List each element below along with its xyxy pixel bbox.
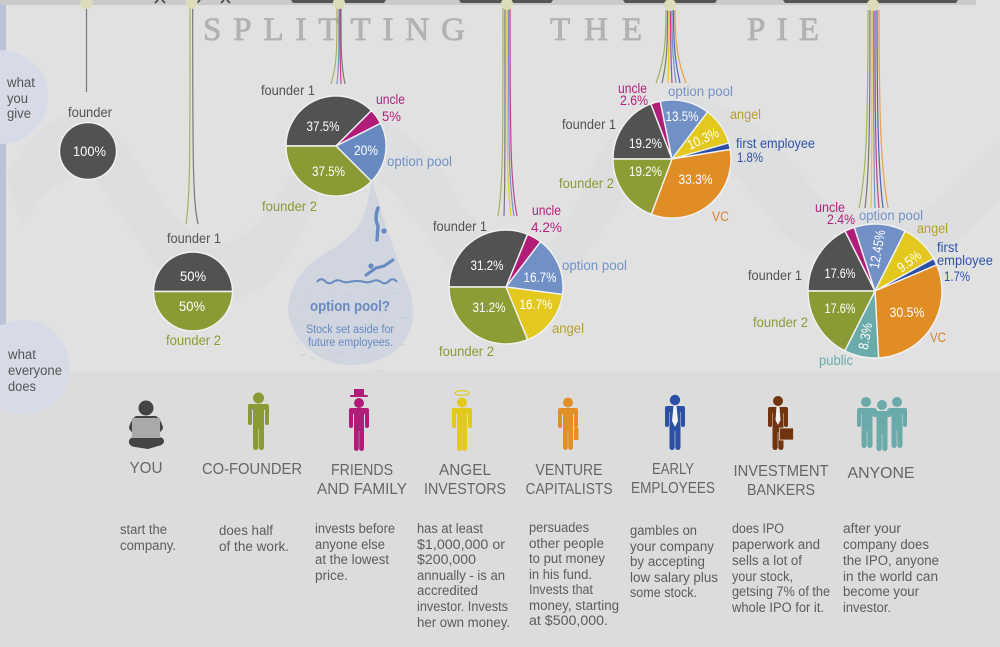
stage 4 pie: angel: 16.7%	[520, 296, 552, 312]
stage 4 pie: angel	[433, 203, 627, 359]
stage 4 pie: angel: angel	[552, 321, 584, 336]
text: investment bankers: does IPO	[732, 521, 784, 536]
heading: venture capitalists	[526, 462, 612, 498]
heading: investment bankers: BANKERS	[747, 482, 815, 499]
text: angel investors: annually - is an	[417, 568, 505, 583]
heading: friends and family: FRIENDS	[331, 462, 393, 479]
text: anyone	[843, 521, 939, 615]
text: venture capitalists: money, starting	[529, 598, 619, 613]
stage 4 pie: angel: 31.2%	[470, 257, 504, 273]
stage 3 pie: friends and family: 37.5%	[306, 118, 340, 134]
icon: venture capitalist	[558, 398, 578, 450]
text: venture capitalists: at $500,000.	[529, 613, 608, 628]
stage 6 pie: public: founder 1	[748, 268, 802, 283]
heading: early employees: EARLY	[652, 461, 694, 478]
water ripples	[295, 293, 409, 371]
heading: angel investors	[424, 462, 506, 498]
icon: friends and family	[349, 389, 369, 451]
callout: option pool drop	[288, 180, 413, 371]
label: what you give: give	[7, 106, 31, 121]
stage 5 pie: venture capital: first employee	[736, 136, 815, 151]
text: early employees: by accepting	[630, 554, 705, 569]
label: what everyone does	[0, 320, 70, 414]
text: early employees	[630, 523, 718, 600]
text: friends and family: price.	[315, 568, 348, 583]
title: THE	[550, 12, 642, 48]
stage 5 pie: venture capital: 2.6%	[620, 93, 648, 108]
text: investment bankers: your stock,	[732, 569, 793, 584]
icon: co-founder	[248, 392, 269, 450]
title	[203, 12, 819, 48]
top bar with hanging knots	[0, 0, 976, 5]
text: venture capitalists: in his fund.	[529, 567, 592, 582]
stage 5 pie: venture capital: 19.2%	[629, 135, 662, 151]
stage 3 pie: friends and family: 37.5%	[312, 163, 345, 179]
callout text: future employees.	[308, 337, 393, 349]
stage 3 pie: friends and family: founder 1	[261, 83, 315, 98]
heading: friends and family: AND FAMILY	[317, 481, 407, 498]
text: anyone: after your	[843, 521, 902, 536]
callout text	[306, 298, 394, 349]
stage 1 pie: founder: founder	[68, 105, 112, 120]
callout text: Stock set aside for	[306, 324, 394, 336]
text: investment bankers: getsing 7% of the	[732, 584, 830, 599]
stage 2 pie: two founders: founder 1	[167, 231, 221, 246]
stage 6 pie: public: 30.5%	[890, 304, 924, 320]
thread knots	[80, 0, 879, 11]
heading: angel investors: INVESTORS	[424, 481, 506, 498]
text: venture capitalists: persuades	[529, 520, 589, 535]
stage 3 pie: friends and family: uncle	[376, 92, 405, 107]
heading: anyone: ANYONE	[848, 465, 914, 482]
stage 4 pie: angel: founder 2	[439, 344, 494, 359]
text: angel investors	[417, 521, 510, 630]
text: anyone: in the world can	[843, 569, 938, 584]
stage 2 pie: two founders: 50%	[180, 268, 206, 284]
label: what everyone does: everyone	[8, 363, 62, 378]
text: early employees: your company	[630, 539, 714, 554]
stage 2 pie: two founders	[154, 231, 232, 348]
stage 5 pie: venture capital: option pool	[668, 84, 733, 99]
text: investment bankers	[731, 521, 830, 615]
stage 3 pie: friends and family	[261, 83, 452, 214]
stage 5 pie: venture capital	[559, 81, 815, 224]
icon: anyone, group of three	[857, 397, 907, 451]
label: what you give	[0, 50, 48, 144]
stage 5 pie: venture capital: founder 1	[562, 117, 616, 132]
text: early employees: some stock.	[630, 585, 697, 600]
stage 4 pie: angel: 4.2%	[531, 220, 562, 235]
stage 6 pie: public: option pool	[859, 208, 923, 223]
heading: venture capitalists: CAPITALISTS	[526, 481, 612, 498]
text: you	[120, 522, 176, 553]
stage 6 pie: public: VC	[930, 330, 946, 345]
stage 3 pie: friends and family: founder 2	[262, 199, 317, 214]
text: early employees: low salary plus	[630, 570, 718, 585]
stage 4 pie: angel: uncle	[532, 203, 561, 218]
text: friends and family	[315, 521, 395, 583]
stage 6 pie: public	[748, 200, 993, 368]
stage 5 pie: venture capital: VC	[712, 209, 729, 224]
icon: swimmer and waves	[317, 260, 397, 283]
text: venture capitalists: Invests that	[529, 582, 593, 597]
stage 6 pie: public: angel	[917, 221, 948, 236]
stage 6 pie: public: public	[819, 353, 853, 368]
text: co-founder: does half	[219, 523, 273, 538]
text: angel investors: investor. Invests	[417, 599, 508, 614]
icon: diver	[376, 208, 387, 240]
heading: co-founder: CO-FOUNDER	[202, 461, 302, 478]
heading: investment bankers	[734, 463, 829, 499]
stage 5 pie: venture capital: 10.3%	[685, 124, 721, 153]
heading: friends and family	[317, 462, 407, 498]
stage 5 pie: venture capital: 19.2%	[629, 163, 662, 179]
text: co-founder	[219, 523, 289, 554]
icon: you with laptop	[129, 400, 164, 449]
heading: venture capitalists: VENTURE	[536, 462, 602, 479]
label: what you give: you	[7, 91, 28, 106]
text: you: company.	[120, 538, 176, 553]
text: you: start the	[120, 522, 167, 537]
heading: you: YOU	[130, 460, 162, 477]
stage 6 pie: public: 9.5%	[894, 247, 924, 275]
stage 5 pie: venture capital: founder 2	[559, 176, 614, 191]
stage 6 pie: public: 17.6%	[824, 265, 856, 281]
heading: early employees	[631, 461, 715, 497]
icon: angel investor	[452, 391, 472, 451]
text: venture capitalists	[529, 520, 619, 628]
stage 4 pie: angel: 16.7%	[524, 269, 556, 285]
text: anyone: the IPO, anyone	[843, 553, 939, 568]
text: investment bankers: paperwork and	[732, 537, 820, 552]
text: friends and family: invests before	[315, 521, 395, 536]
stage 5 pie: venture capital: 33.3%	[678, 171, 712, 187]
stage 4 pie: angel: option pool	[562, 258, 627, 273]
text: angel investors: has at least	[417, 521, 483, 536]
text: anyone: investor.	[843, 600, 891, 615]
title: SPLITTING	[203, 12, 465, 48]
text: anyone: company does	[843, 537, 929, 552]
stage 2 pie: two founders: founder 2	[166, 333, 221, 348]
stage 2 pie: two founders: 50%	[179, 298, 205, 314]
stage 6 pie: public: founder 2	[753, 315, 808, 330]
stage 6 pie: public: 17.6%	[824, 300, 856, 316]
callout text: option pool?	[310, 298, 390, 315]
stage 1 pie: founder	[60, 105, 116, 180]
stage 6 pie: public: 8.3%	[855, 321, 875, 351]
text: venture capitalists: to put money	[529, 551, 605, 566]
stage 6 pie: public: uncle	[815, 200, 845, 215]
heading: early employees: EMPLOYEES	[631, 480, 715, 497]
title: PIE	[747, 12, 819, 48]
stage 6 pie: public: 2.4%	[827, 212, 855, 227]
text: friends and family: at the lowest	[315, 552, 389, 567]
text: early employees: gambles on	[630, 523, 697, 538]
text: venture capitalists: other people	[529, 536, 604, 551]
stage 4 pie: angel: founder 1	[433, 219, 487, 234]
stage 3 pie: friends and family: 5%	[382, 109, 401, 124]
stage 1 pie: founder: 100%	[73, 143, 106, 159]
text: friends and family: anyone else	[315, 537, 385, 552]
stage 6 pie: public: first	[937, 240, 958, 255]
icon: investment banker	[768, 396, 794, 450]
label: what you give: what	[6, 75, 35, 90]
stage 5 pie: venture capital: 1.8%	[737, 150, 763, 165]
text: angel investors: her own money.	[417, 615, 510, 630]
stage 3 pie: friends and family: 20%	[354, 142, 378, 158]
text: angel investors: accredited	[417, 583, 478, 598]
heading: angel investors: ANGEL	[439, 462, 491, 479]
text: anyone: become your	[843, 584, 919, 599]
text: co-founder: of the work.	[219, 539, 289, 554]
label: what everyone does: what	[7, 347, 36, 362]
stage 5 pie: venture capital: angel	[730, 107, 761, 122]
label: what everyone does: does	[8, 379, 36, 394]
text: angel investors: $1,000,000 or	[417, 537, 506, 552]
stage 6 pie: public: employee	[937, 253, 993, 268]
heading: investment bankers: INVESTMENT	[734, 463, 829, 480]
icon: early employee	[665, 395, 685, 450]
text: investment bankers: sells a lot of	[732, 553, 802, 568]
stage 6 pie: public: 1.7%	[944, 269, 970, 284]
text: angel investors: $200,000	[417, 552, 476, 567]
stage 5 pie: venture capital: 13.5%	[666, 108, 698, 124]
stage 4 pie: angel: 31.2%	[472, 299, 506, 315]
text: investment bankers: whole IPO for it.	[731, 600, 824, 615]
stage 3 pie: friends and family: option pool	[387, 154, 452, 169]
left axis bar	[0, 5, 6, 325]
stage 5 pie: venture capital: uncle	[618, 81, 647, 96]
stage 6 pie: public: 12.45%	[866, 229, 888, 270]
threads from the top bar to each stage	[86, 8, 888, 224]
